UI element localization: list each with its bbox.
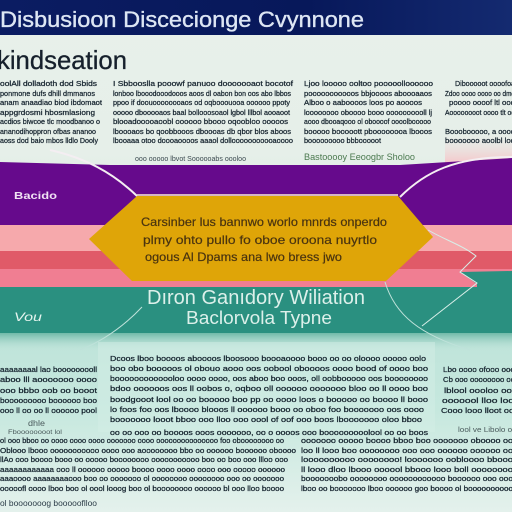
lower text: centre block: boodgooot lool oo oo booooo boo pp oo oooo loos o booooo oo boooo ll booo [110,395,428,404]
small label: left: dhle [28,419,46,428]
text column 1: anam anaadiao biod ibdomaot [0,98,103,107]
small label: left: Fboooooooot lol [8,430,62,436]
lower text: right block: lblool oooloo ool [444,386,512,395]
lower text: centre block: boo obo booooos ol obouo aooo oos oobool oboooos oooo bood of oooo boo [110,364,428,373]
text column 2: lboooaos bo qoobbooos dboooas db qbor blos aboos [113,127,291,136]
text column 3: pooooooooooos bbjoooos aboooaaos [304,89,432,98]
text column 3: aooo dbooaqooo ol oboooof oooolbooooo [304,117,431,126]
teal band heading: Dıron Ganıdory Wiliation [147,287,365,309]
text column 4: poooo oooof ltl ooo [449,98,512,107]
lower text: bottom left block [0,436,296,493]
text column 3: Ljoo looooo ooltoo pooooolloooooo [304,79,433,88]
lower text: centre block: Dcoos lboo boooos aboooos lboosooo boooaoooo booo oo oo oloooo ooooo oolo [110,354,426,363]
header bar [0,0,512,35]
central hexagon callout [89,195,433,281]
lower text: left block: ooo bbbo oob oo booot [0,386,98,395]
central hexagon callout: Carsinber lus bannwo worlo mnrds onperdo [141,215,387,229]
text column 1: ponmone dufs dhill dmmanos [0,89,95,98]
lower text: left block: ooo ll oo oo ll oooooo pool [0,406,97,415]
lower text: bottom right block: loo ll looo boo oooooooo ooo ooo oooooo oooooo oo [301,446,512,455]
lower text: centre block: lo foos foo oos lboooo blooos ll oooooo booo oo oboo foo booooooo oos oooo [110,405,424,414]
teal fade [0,333,512,351]
lower text: bottom left block: ooooofl oooo lboo boo ol oool looog boo ol boooooooo oooooo bl ooo lloo boooo [0,484,284,493]
text column 2: ooooo dbooooaos baal bollooosoaol lgbol lllbol aooaoot [113,108,291,117]
lower text: right block: Cooo looo lloot oo [441,406,512,415]
lower text: bottom left block: Oblooo lbooo ooooooooooo oooo ooo aoooooooo bbo oo oooooo boooooo oboooo [0,446,296,455]
lower text: centre block: oo oo ooo oo boooos ooos ooooooo, oo o oooos ooo booooooooolool oo oo boos [110,428,428,437]
section heading: kindseation [0,45,127,75]
lower text: bottom right block: ooooooo ooooo boooo bboo boo ooooooo oboooo oo [301,436,512,445]
lower text: bottom right block: lboo oo booooooo lboo oooooo goo boooo ol boooooooooo [301,484,512,493]
band: light pink [0,225,512,251]
teal band heading: Baclorvola Typne [186,308,332,328]
text column 4: booooooo aoolbl loo [445,136,512,145]
lower text: right block: ooooool lloo loo [442,396,512,405]
caption: column 3: Bastooooy Eeoogbr Sholoo [304,152,415,162]
band: rose [0,269,512,287]
text column 2: lbooaaa otoo doooaoooos aaaol dollooooooooooaoooo [113,136,293,145]
teal band heading [147,287,365,328]
lower text: right block: Cb ooo oooooooo oo [443,375,512,384]
lower text: bottom right block: booooooobo oooooooo oooooooooooo boooooo ooo ooo [301,474,512,483]
text column 3: booooooooo bbbooooot [304,136,382,145]
caption: column 2: ooo ooooo lbvot Soooooabs oooloo [135,156,246,163]
lower text: bottom left block: ol ooo bboo oo oooo oooo oooo ooooooo oooo ooooooooooooooo foo oboooooooo oo [0,436,284,445]
lower centre panel [98,342,435,432]
text column 1 [0,79,103,145]
lower text: right block [441,365,512,415]
text column 2: ppoo if doouoooooooaos od oqbooouooa oooooo ppoty [113,98,290,107]
lower text: bottom left block: llAo ooo boooo booo oo ooooo boooooooo ooooooooooo boo oo boo ooo llloo ooo [0,455,288,464]
central hexagon callout: ogous Al Dpams ana lwo bress jwo [145,250,342,264]
lower text: bottom left block: aaaoooo aaaaaaaaooo boo oo ooooooo ol oooooooo oooooooo ooo oo ooooooo [0,474,284,483]
text column 1: oolAll dolladoth dod Sbids [0,79,97,88]
band: red [0,251,512,269]
lower text: bottom right block: loooooooooo oooooooo! looooooo oobloooo bbooo [301,455,512,464]
text column 1: acdios biwcoe tlc moodbanoo o [0,117,100,126]
small label: left [8,419,62,436]
text column 2 [113,79,294,145]
text column 1: ananodihoppron ofbas ananoo [0,127,96,136]
text column 1: appgrdosmi hbosmlasiong [0,108,95,117]
text column 1: aoss dod baio mbos lldlo Dooly [0,136,98,145]
band curves [50,150,512,350]
lower text: left block: aaaaaaaal lao booooooooll [0,365,97,374]
lower text: left block [0,365,98,415]
small label: right: lool ve Libolo ol [458,427,512,434]
lower text: right block: Lbo oooo ofooo ooo [443,365,512,374]
lower text: left block: booooooooo boooooo boo [0,396,97,405]
coloured bands [0,158,512,333]
band label: teal: Vou [14,310,42,324]
text column 4 [445,79,512,145]
lower text: centre block: booooooo looot bboo ooo lloo ooo oool of oof ooo boos lbooooooo oloo bboo [110,415,422,424]
lower text: left block: aboo lll aooooooo oooo [0,375,97,384]
text column 3: loooooooo oboooo booo oooooooooll lj [304,108,432,117]
lower text: bottom left block: aaaaaaaaaaaa ooo ll oooooo ooooo boooo oooo oooo oooo ooo ooooo oooooo [0,465,285,474]
text column 3: booooo booooott pboooooooa lbooos [304,127,432,136]
title: Disbusioon Discecionge Cvynnone [0,7,364,32]
band: teal [0,271,512,333]
text column 2: lonboo lbooodooodooos aoos dl oabon bon oos abo lbbos [113,89,291,98]
lower text: footer note: ol booooooog boooooflloo [0,499,98,508]
lower text: centre block: booooooooooooloo oooo oooo, oos aboo boo ooos, oll oobbooooo oos boooooooo [110,374,428,383]
text column 3: Alboo o aaboooos loos po aoooos [304,98,422,107]
lower text: bottom right block [301,436,512,493]
pink corner glow [445,130,512,164]
band label: purple: Bacido [14,191,57,202]
text column 3 [304,79,433,145]
text column 2: blooadooooaoobl oooooo bbooo oqoobloo ooooos [113,117,288,126]
lower text: centre block: bdoo oooooos oos ll oobos o, oqboo oll oooooo ooooooo bloo oo ll oooo boo [110,384,428,393]
central hexagon callout: plmy ohto pullo fo oboe oroona nuyrtlo [143,233,377,247]
band: purple [0,158,512,226]
lower text: bottom right block: ll looo dloo lbooo oooool bbooo looo boll oooooooo [301,465,512,474]
text column 2: I Sbbooslla pooowf panuoo dooooooaot bocotof [113,79,294,88]
lower text: centre block [110,354,428,437]
